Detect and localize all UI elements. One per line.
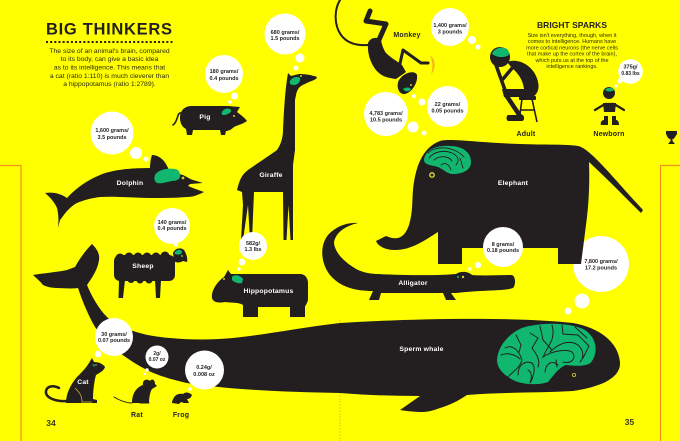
bubble: elephant <box>364 92 426 136</box>
bubble: alligator <box>468 227 523 271</box>
bubble: dolphin: 3.5 pounds <box>97 135 127 141</box>
animal: dolphin: Dolphin <box>117 180 143 187</box>
bubble: sperm whale <box>564 236 629 314</box>
animal: cat: Cat <box>77 379 89 386</box>
animal: sperm whale <box>33 244 620 412</box>
bubble: cat: 0.07 pounds <box>98 338 130 344</box>
animal: hippopotamus <box>212 270 308 317</box>
bright sparks text <box>526 33 618 70</box>
bubble: sheep: 140 grams/ <box>158 220 187 226</box>
title: BIG THINKERS <box>46 20 172 38</box>
bubble: monkey: 3 pounds <box>438 30 462 36</box>
bubble: newborn: 0.83 lbs <box>621 71 640 77</box>
animal: dolphin <box>45 155 204 228</box>
animal: rat: Rat <box>131 412 143 419</box>
intro text block: as to its intelligence. This means that <box>54 64 165 72</box>
bright sparks text: that make up the cortex of the brain), <box>527 52 617 58</box>
figure: newborn <box>593 87 625 138</box>
animal: monkey: Monkey <box>393 32 421 39</box>
figure: adult: Adult <box>517 131 536 138</box>
bubble: pig: 180 grams/ <box>210 69 239 75</box>
animal: elephant <box>376 140 643 264</box>
animal: frog <box>172 392 192 419</box>
bubble: pig: 0.4 pounds <box>209 76 239 82</box>
bright sparks text: intelligence rankings. <box>546 64 598 70</box>
bubble: giraffe: 680 grams/ <box>271 30 300 36</box>
bubble: giraffe <box>264 14 306 70</box>
bubble: cat <box>95 318 133 357</box>
bubble: elephant: 10.5 pounds <box>370 118 402 124</box>
bubble: pig <box>205 55 243 104</box>
bubble: monkey brain: 0.05 pounds <box>431 108 464 114</box>
animal: sheep: Sheep <box>132 263 154 270</box>
bubble: monkey <box>431 8 480 50</box>
animal: rat <box>114 380 157 419</box>
bubble: sheep: 0.4 pounds <box>157 226 187 232</box>
animal: alligator: Alligator <box>398 280 428 287</box>
animal: monkey <box>336 0 435 94</box>
animal: hippopotamus: Hippopotamus <box>244 288 294 295</box>
intro text block: a cat (ratio 1:110) is much cleverer than <box>50 73 169 80</box>
figure: newborn: Newborn <box>593 131 625 138</box>
icon: trophy <box>666 131 677 144</box>
animal: cat <box>46 358 105 403</box>
bubble: hippopotamus: 1.3 lbs <box>244 247 262 253</box>
intro text block: a hippopotamus (ratio 1:2789). <box>63 81 156 88</box>
bubble: alligator: 0.18 pounds <box>487 248 519 254</box>
bubble: hippopotamus <box>237 232 267 271</box>
intro text block: The size of an animal's brain, compared <box>49 48 170 55</box>
bubble: sperm whale: 17.2 pounds <box>585 266 617 272</box>
page number: 34: 34 <box>46 418 56 428</box>
bubble: sperm whale: 7,800 grams/ <box>584 259 618 265</box>
animal: pig: Pig <box>199 114 211 121</box>
bubble: rat: 2g/ <box>153 351 161 357</box>
heading: bright sparks: BRIGHT SPARKS <box>537 20 607 30</box>
bright sparks text: more cortical neurons (the nerve cells <box>526 46 618 52</box>
bubble: hippopotamus: 582g/ <box>246 241 260 247</box>
bright sparks text: which puts us at the top of the <box>534 58 609 64</box>
bubble: frog <box>185 350 224 391</box>
intro text block: to its body, can give a basic idea <box>61 56 159 63</box>
bubble: frog: 0.24g/ <box>196 365 212 371</box>
bubble: rat: 0.07 oz <box>149 357 166 363</box>
animal: sheep <box>114 248 187 298</box>
animal: giraffe <box>237 73 317 240</box>
bubble: rat <box>144 346 168 375</box>
bright sparks text: Size isn't everything, though, when it <box>527 33 617 39</box>
page number: 35: 35 <box>625 417 634 427</box>
whale brain <box>497 324 596 384</box>
animal: pig <box>173 106 247 135</box>
bright sparks text: comes to intelligence. Humans have <box>528 39 616 45</box>
animal: elephant: Elephant <box>498 180 529 187</box>
bubble: frog: 0.008 oz <box>193 372 215 378</box>
bubble: dolphin <box>90 112 148 162</box>
bubble: cat: 30 grams/ <box>101 332 127 338</box>
bubble: monkey: 1,400 grams/ <box>433 23 467 29</box>
bubble: alligator: 8 grams/ <box>492 242 515 248</box>
intro text block <box>49 48 170 88</box>
figure: adult <box>490 47 539 138</box>
bubble: monkey brain: 22 grams/ <box>435 102 461 108</box>
animal: alligator <box>322 223 515 300</box>
bubble: newborn <box>614 59 643 88</box>
bubble: elephant: 4,783 grams/ <box>369 111 403 117</box>
bubble: dolphin: 1,600 grams/ <box>95 128 129 134</box>
animal: sperm whale: Sperm whale <box>399 346 444 353</box>
bubble: newborn: 375g/ <box>623 64 638 70</box>
bubble: giraffe: 1.5 pounds <box>270 36 300 42</box>
elephant brain <box>424 146 471 174</box>
animal: frog: Frog <box>173 412 189 419</box>
bubble: monkey brain <box>412 86 468 127</box>
bubble: sheep <box>154 208 190 247</box>
animal: giraffe: Giraffe <box>259 172 283 179</box>
